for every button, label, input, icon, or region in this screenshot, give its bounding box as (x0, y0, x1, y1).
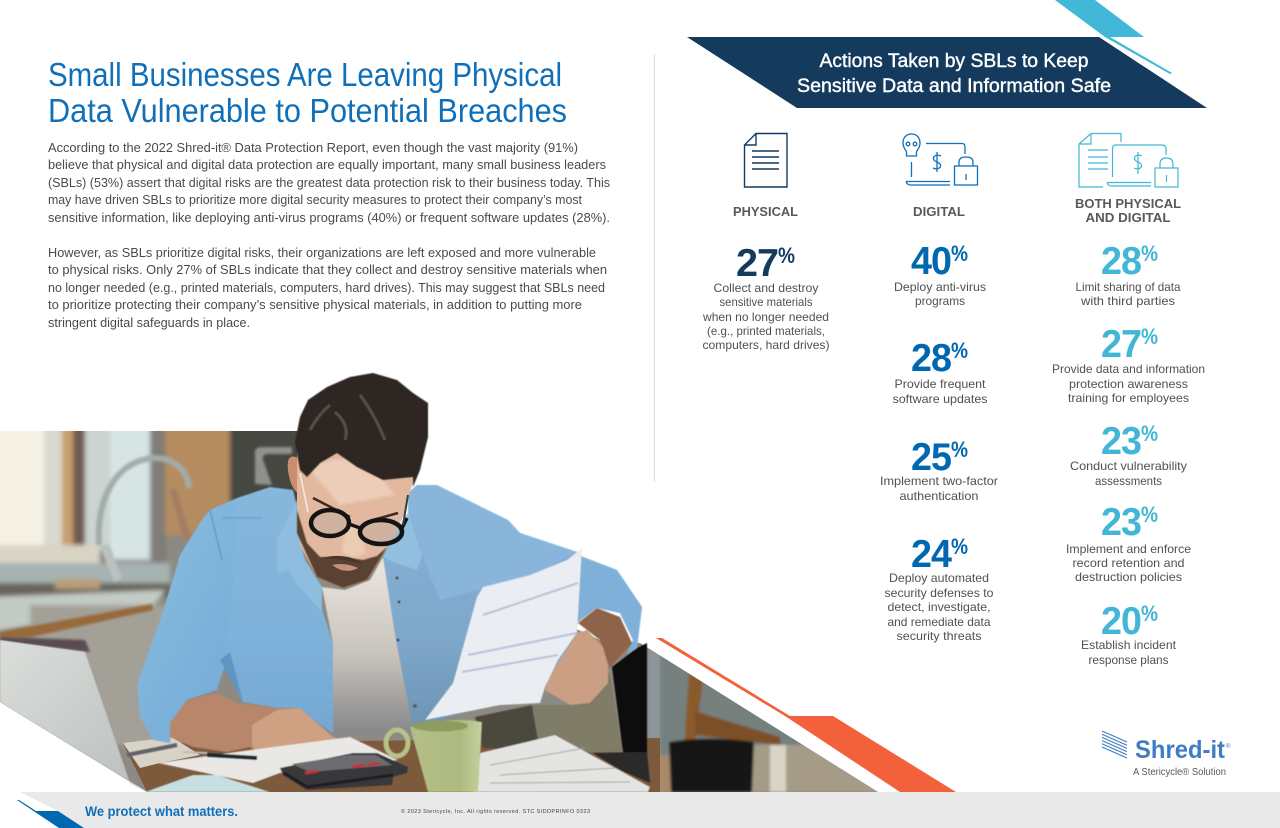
intro paragraph: (SBLs) (53%) assert that digital risks are the greatest data protection risk to their business today. This (48, 175, 610, 190)
intro paragraph: According to the 2022 Shred-it® Data Protection Report, even though the vast majority (91%) (48, 140, 578, 155)
label: collect and destroy: when no longer needed (702, 310, 829, 324)
label: software updates: software updates (892, 392, 988, 406)
banner: section heading: Actions Taken by SBLs to Keep (820, 51, 1088, 72)
stat: 23 percent second: % (1141, 502, 1158, 527)
stat: 20 percent: % (1141, 601, 1158, 626)
heading: both physical and digital: AND DIGITAL (1086, 210, 1171, 225)
label: third parties (1076, 280, 1181, 308)
footer bar (17, 792, 1280, 828)
label: two-factor authentication: authentication (900, 489, 978, 503)
man: shirt and torso (137, 485, 642, 743)
label: vulnerability assessments: Conduct vulnerability (1070, 459, 1187, 473)
footer tagline: We protect what matters. (85, 803, 238, 819)
intro paragraph: may have driven SBLs to prioritize more digital security measures to protect their company’s most (48, 192, 582, 207)
label: incident response: response plans (1088, 653, 1168, 667)
stat: 40 percent: 40 (911, 240, 951, 283)
label: anti-virus: Deploy anti-virus (894, 280, 986, 294)
trousers and chair (475, 643, 647, 753)
logo: Shred-it: Shred-it (1135, 736, 1226, 764)
icon: skull, laptop and lock (903, 134, 978, 185)
stat: 20 percent: 20 (1101, 600, 1141, 643)
column: physical (702, 134, 830, 352)
icon: document, laptop and lock (1079, 134, 1178, 187)
intro paragraph: sensitive information, like deploying anti-virus programs (40%) or frequent software updates (28%). (48, 210, 610, 225)
stat: 25 percent: % (951, 437, 968, 462)
stat: 24 percent: 24 (911, 533, 952, 576)
label: retention policies: record retention and (1072, 556, 1184, 570)
stat: 27 percent physical: % (778, 243, 795, 268)
stat: 28 percent: 28 (1101, 240, 1141, 283)
stat: 27 percent physical: 27 (736, 242, 778, 285)
label: awareness training: protection awareness (1069, 377, 1188, 391)
title: Data Vulnerable to Potential Breaches (48, 92, 567, 129)
stat: 23 percent second: 23 (1101, 501, 1141, 544)
stat: 25 percent: 25 (911, 436, 951, 479)
label: incident response: Establish incident (1081, 638, 1177, 652)
ear (288, 456, 299, 494)
heading: digital: DIGITAL (913, 204, 965, 219)
heading: physical: PHYSICAL (733, 204, 798, 219)
desk (123, 738, 660, 792)
title (48, 56, 567, 129)
second paragraph: no longer needed (e.g., printed materials, computers, hard drives). This may suggest that SBLs need (48, 280, 605, 295)
green coffee mug (386, 720, 482, 792)
label: vulnerability assessments: assessments (1095, 474, 1162, 488)
title: Small Businesses Are Leaving Physical (48, 56, 562, 93)
label: collect and destroy: computers, hard drives) (702, 338, 830, 352)
left sleeve (137, 498, 270, 743)
stat: 28 percent: % (951, 338, 968, 363)
label: collect and destroy: sensitive materials (720, 295, 812, 309)
second paragraph: However, as SBLs prioritize digital risks, their organizations are left exposed and more vulnerable (48, 245, 596, 260)
handheld paper (425, 548, 582, 720)
label: anti-virus (894, 280, 986, 308)
intro paragraph (48, 140, 610, 225)
column: digital (880, 134, 998, 643)
banner: section heading (687, 37, 1207, 108)
label: incident response (1081, 638, 1177, 667)
stat: 28 percent: 28 (911, 337, 951, 380)
photo background: kitchen (0, 425, 880, 792)
label: automated security defenses: and remediate data (888, 615, 991, 629)
label: software updates: Provide frequent (894, 377, 986, 391)
hair (295, 373, 428, 487)
footer blue accent (17, 800, 84, 828)
label: third parties: Limit sharing of data (1076, 280, 1181, 294)
second paragraph: stringent digital safeguards in place. (48, 315, 250, 330)
orange accent (656, 638, 956, 792)
label: automated security defenses: security defenses to (884, 586, 994, 600)
label: anti-virus: programs (915, 294, 965, 308)
label: software updates (892, 377, 988, 406)
banner: section heading: Sensitive Data and Information Safe (797, 76, 1111, 97)
second paragraph: to physical risks. Only 27% of SBLs indicate that they collect and destroy sensitive materials when (48, 262, 607, 277)
label: awareness training: Provide data and information (1052, 362, 1205, 376)
label: awareness training (1052, 362, 1205, 405)
label: collect and destroy: (e.g., printed materials, (707, 324, 825, 338)
logo: Shred-it: A Stericycle® Solution (1133, 767, 1226, 778)
logo: Shred-it: ® (1226, 743, 1231, 750)
stat: 28 percent: % (1141, 241, 1158, 266)
man: head, hair, beard and glasses (288, 373, 428, 588)
heading: both physical and digital: BOTH PHYSICAL (1075, 196, 1181, 211)
label: collect and destroy (702, 281, 830, 352)
eyebrows (313, 498, 398, 520)
label: awareness training: training for employees (1068, 391, 1189, 405)
beard (297, 510, 387, 588)
heading: both physical and digital (1075, 196, 1181, 225)
label: two-factor authentication: Implement two-factor (880, 474, 998, 488)
logo: Shred-it (1102, 731, 1231, 778)
footer copyright: © 2023 Stericycle, Inc. All rights reserved. STC SIDDPRINFO 0323 (401, 808, 590, 815)
label: collect and destroy: Collect and destroy (714, 281, 818, 295)
stat: 27 percent: % (1141, 324, 1158, 349)
label: automated security defenses: Deploy automated (889, 571, 989, 585)
label: retention policies (1066, 542, 1191, 584)
laptop (0, 640, 147, 792)
label: two-factor authentication (880, 474, 998, 503)
photo: man reviewing papers with calculator (0, 373, 880, 792)
right torso panel (383, 485, 642, 733)
icon: document (744, 134, 787, 187)
label: retention policies: Implement and enforce (1066, 542, 1191, 556)
label: automated security defenses (884, 571, 994, 643)
face (297, 440, 415, 588)
desk items: pen, papers and calculator (127, 735, 650, 792)
column: both physical and digital (1052, 134, 1205, 667)
label: vulnerability assessments (1070, 459, 1187, 488)
left torso panel (220, 487, 333, 733)
second paragraph: to prioritize protecting their company’s sensitive physical materials, in addition to putting more (48, 297, 582, 312)
left collar (277, 500, 322, 612)
stat: 40 percent: % (951, 241, 968, 266)
stat: 27 percent: 27 (1101, 323, 1141, 366)
man: forearms and hands (170, 608, 632, 765)
intro paragraph: believe that physical and digital data protection are equally important, many small business leaders (48, 157, 606, 172)
right background: chair and mug (647, 640, 880, 792)
stat: 23 percent: % (1141, 421, 1158, 446)
decorative teal accent (1055, 0, 1172, 74)
second paragraph (48, 245, 607, 330)
glasses (311, 510, 349, 536)
label: retention policies: destruction policies (1075, 570, 1182, 584)
label: third parties: with third parties (1080, 294, 1175, 308)
label: automated security defenses: detect, investigate, (888, 600, 990, 614)
stat: 24 percent: % (951, 534, 968, 559)
tee (322, 557, 414, 733)
right collar (383, 513, 422, 570)
label: automated security defenses: security threats (896, 629, 982, 643)
stat: 23 percent: 23 (1101, 420, 1141, 463)
